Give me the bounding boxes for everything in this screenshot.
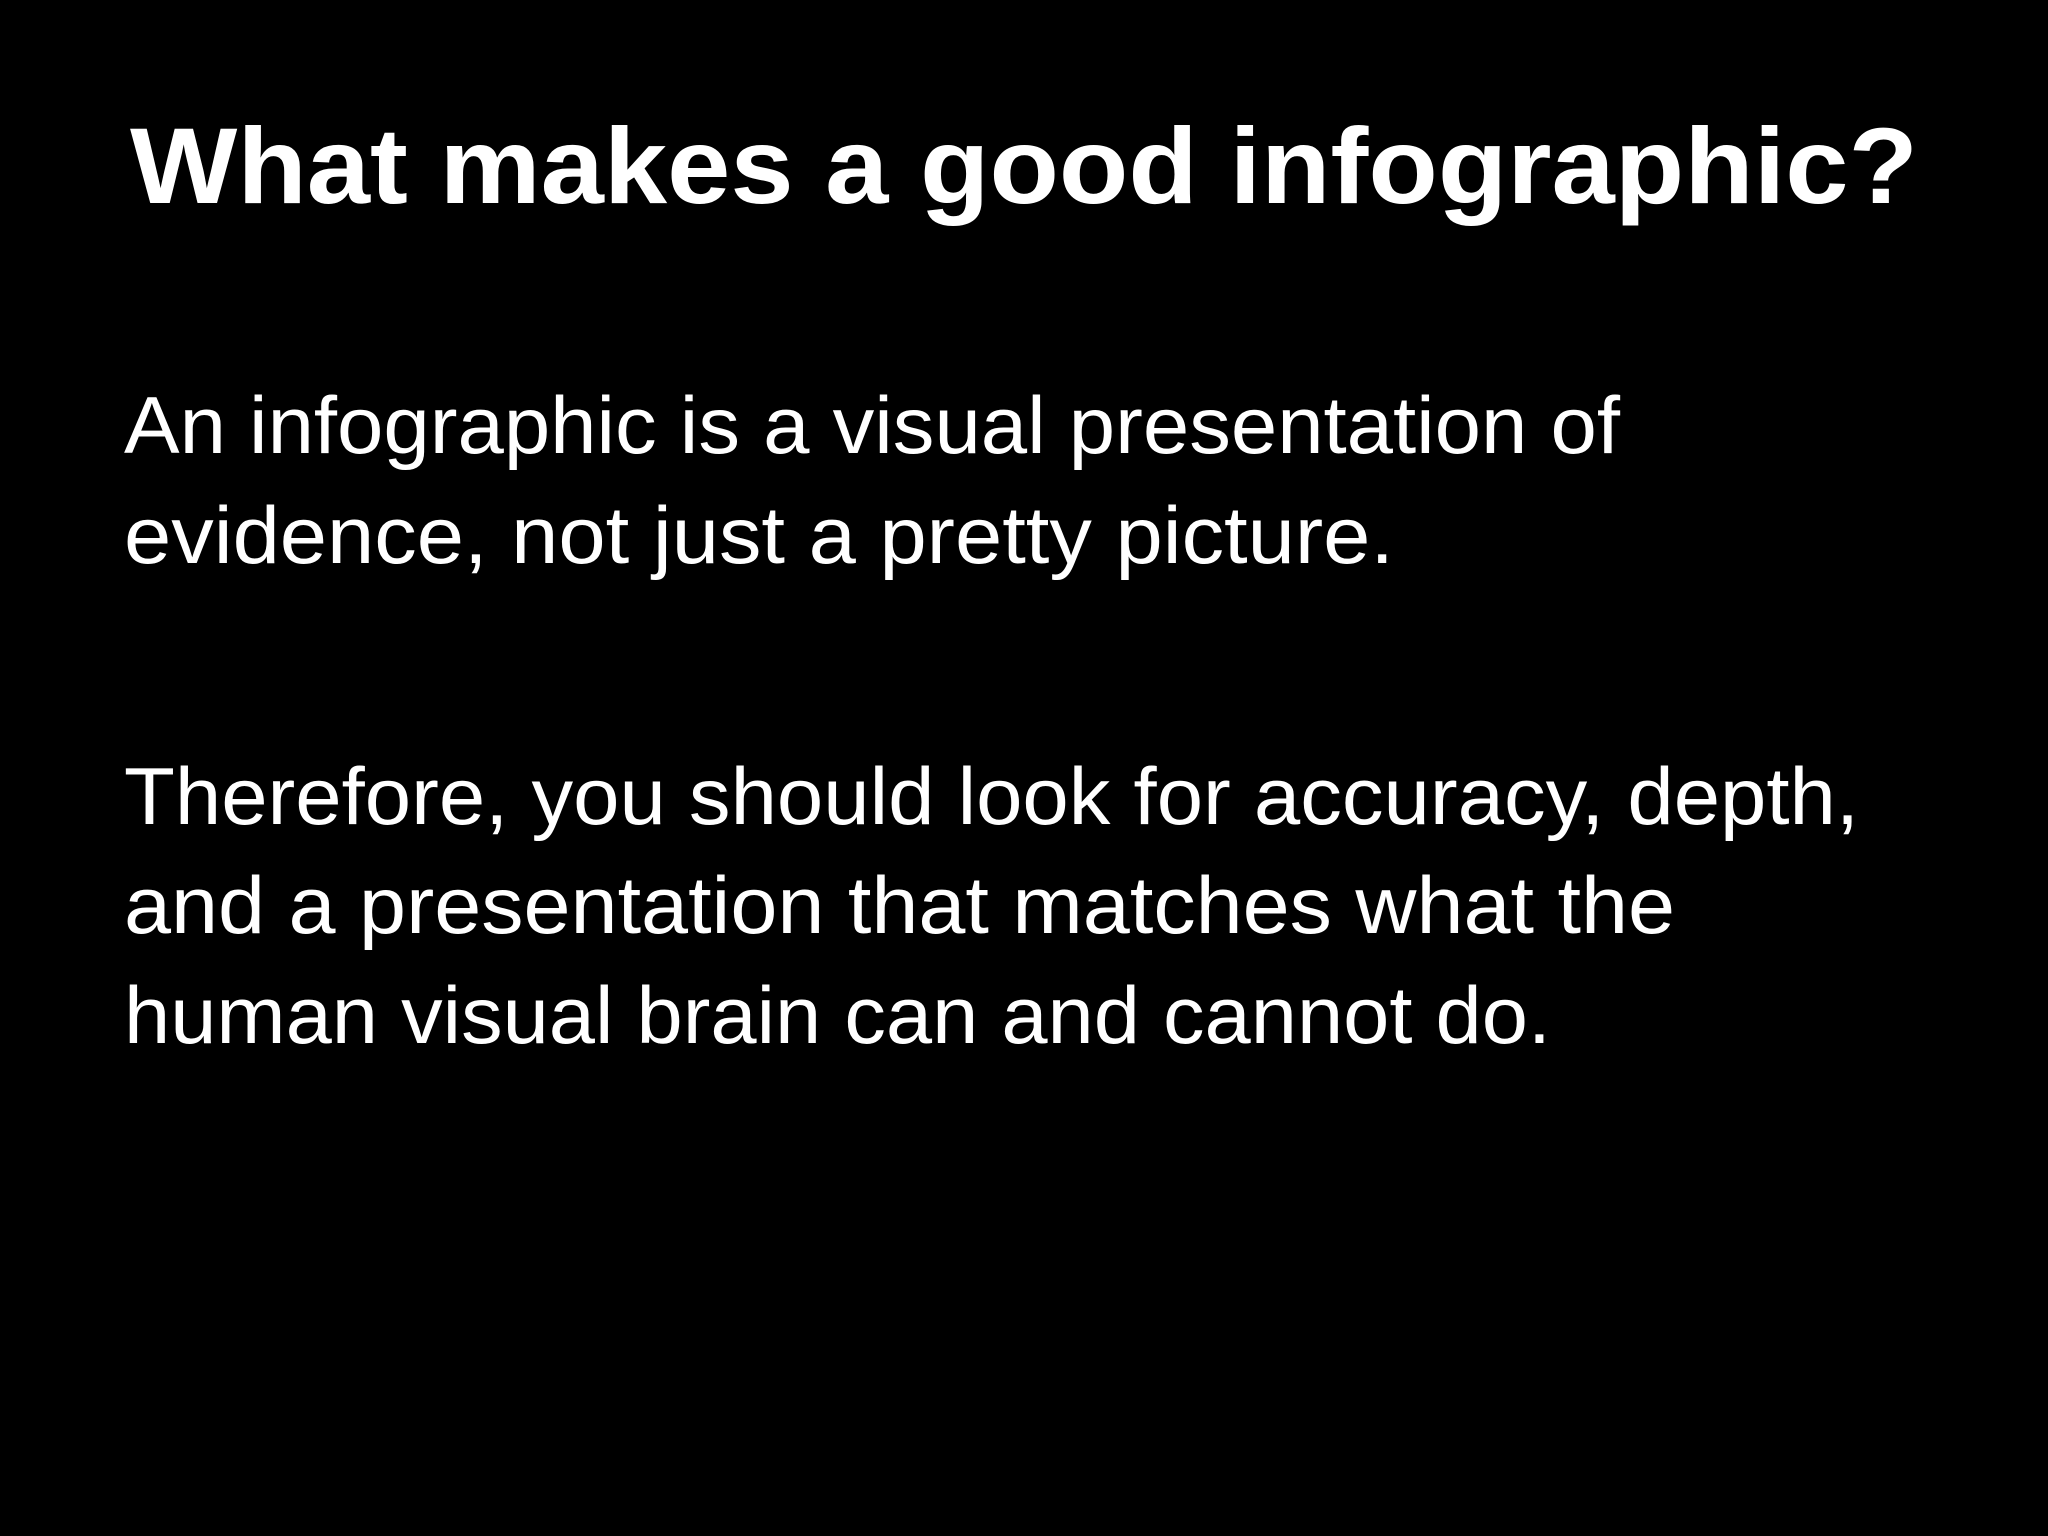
text block: what to look for: and a presentation that matches what the bbox=[124, 861, 1675, 951]
title: What makes a good infographic? bbox=[130, 105, 1918, 226]
text block: what to look for bbox=[124, 752, 1859, 1061]
text block: what to look for: Therefore, you should look for accuracy, depth, bbox=[124, 752, 1859, 842]
text block: definition: evidence, not just a pretty picture. bbox=[124, 491, 1394, 581]
text block: definition: An infographic is a visual presentation of bbox=[124, 381, 1620, 471]
text block: what to look for: human visual brain can and cannot do. bbox=[124, 971, 1551, 1061]
text block: definition bbox=[124, 381, 1620, 581]
